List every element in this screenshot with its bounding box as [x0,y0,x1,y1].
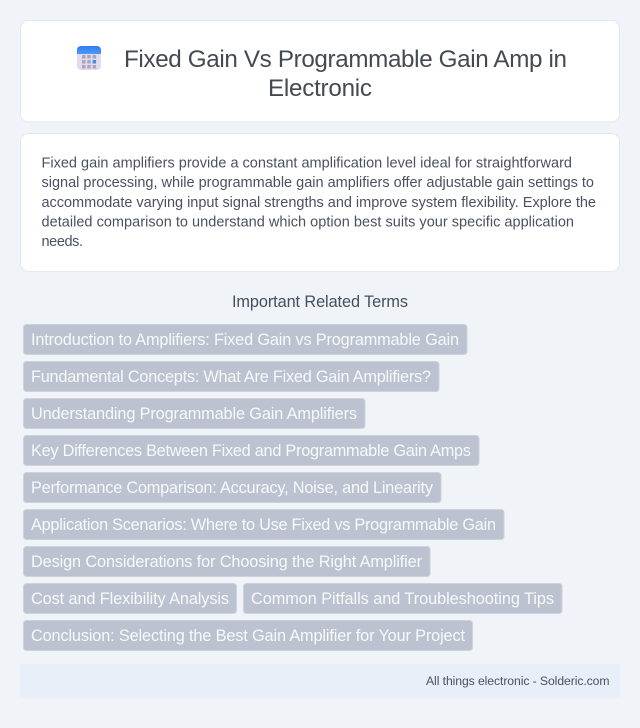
tag: common pitfalls: Common Pitfalls and Troubleshooting Tips [251,590,554,608]
tag: application scenarios [24,510,504,540]
title second line: Electronic [268,75,372,102]
icon: calendar [77,46,101,70]
footer [20,664,620,698]
tag: design considerations [24,546,430,576]
panel: related term tags [24,324,562,650]
tag: design considerations: Design Considerations for Choosing the Right Amplifier [31,553,423,571]
tag: fundamental concepts: Fundamental Concepts: What Are Fixed Gain Amplifiers? [31,368,431,386]
panel: description card [20,134,620,272]
heading: important related terms: Important Related Terms [232,293,408,311]
tag: introduction [24,324,467,354]
text block: description: needs. [42,234,83,250]
tag: conclusion: Conclusion: Selecting the Best Gain Amplifier for Your Project [31,627,465,645]
text block: description: detailed comparison to understand which option best suits your specific application [42,214,574,230]
title: Fixed Gain Vs Programmable Gain Amp in [124,46,567,73]
tag: key differences: Key Differences Between Fixed and Programmable Gain Amps [31,442,471,460]
tag: application scenarios: Application Scenarios: Where to Use Fixed vs Programmable Gain [31,516,496,534]
text block: description: Fixed gain amplifiers provide a constant amplification level ideal for straightforward [42,156,572,172]
tag: understanding pgas: Understanding Programmable Gain Amplifiers [31,405,357,423]
tag: cost and flexibility: Cost and Flexibility Analysis [31,590,229,608]
panel: header card [20,20,620,122]
tag: key differences [24,436,479,466]
text block: description: signal processing, while programmable gain amplifiers offer adjustable gain settings to [42,175,594,191]
tag: performance comparison: Performance Comparison: Accuracy, Noise, and Linearity [31,479,434,497]
tag: fundamental concepts [24,362,439,392]
text block: description: accommodate varying input signal strengths and improve system flexibility. Explore the [42,195,596,211]
tag: introduction: Introduction to Amplifiers: Fixed Gain vs Programmable Gain [31,331,459,349]
text block: description [42,156,596,250]
tag: performance comparison [24,472,441,502]
tag: common pitfalls [244,584,562,614]
footer credit: All things electronic - Solderic.com [426,674,610,688]
tag: cost and flexibility [24,584,236,614]
tag: understanding pgas [24,398,365,428]
tag: conclusion [24,620,472,650]
